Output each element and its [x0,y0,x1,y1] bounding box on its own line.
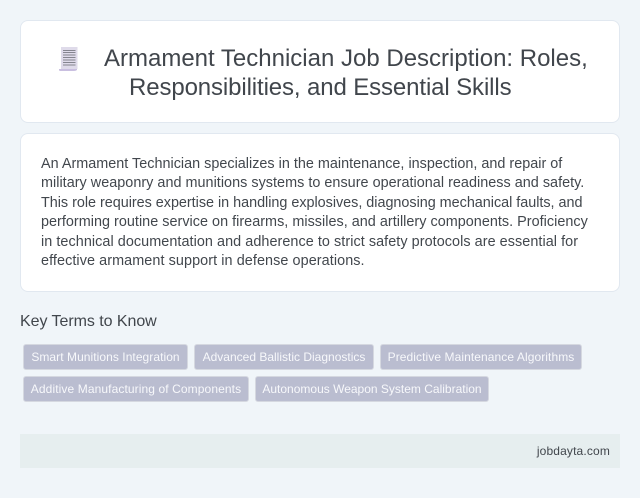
footer bar [20,434,620,468]
title: Responsibilities, and Essential Skills [129,74,511,101]
tag: Additive Manufacturing of Components [31,382,241,396]
tag: Smart Munitions Integration [31,350,180,364]
title: Armament Technician Job Description: Roles, [104,45,588,72]
description text: military weaponry and munitions systems to ensure operational readiness and safety. [41,175,584,191]
description text: An Armament Technician specializes in the maintenance, inspection, and repair of [41,156,562,172]
description text: This role requires expertise in handling explosives, diagnosing mechanical faults, and [41,195,582,211]
tag [255,376,489,402]
tag [23,344,188,370]
description card [20,133,620,292]
title [104,45,588,101]
description text [41,156,588,269]
tag [194,344,374,370]
icon: document scroll [59,47,78,71]
tag [380,344,582,370]
footer text: jobdayta.com [537,444,610,458]
tags [23,344,582,402]
header card [20,20,620,123]
tag: Predictive Maintenance Algorithms [388,350,574,364]
description text: in technical documentation and adherence to strict safety protocols are essential for [41,234,578,250]
tag: Autonomous Weapon System Calibration [262,382,482,396]
tag: Advanced Ballistic Diagnostics [203,350,365,364]
description text: performing routine service on firearms, missiles, and artillery components. Proficiency [41,214,588,230]
description text: effective armament support in defense operations. [41,253,365,269]
tag [23,376,249,402]
heading: key terms: Key Terms to Know [20,313,157,330]
